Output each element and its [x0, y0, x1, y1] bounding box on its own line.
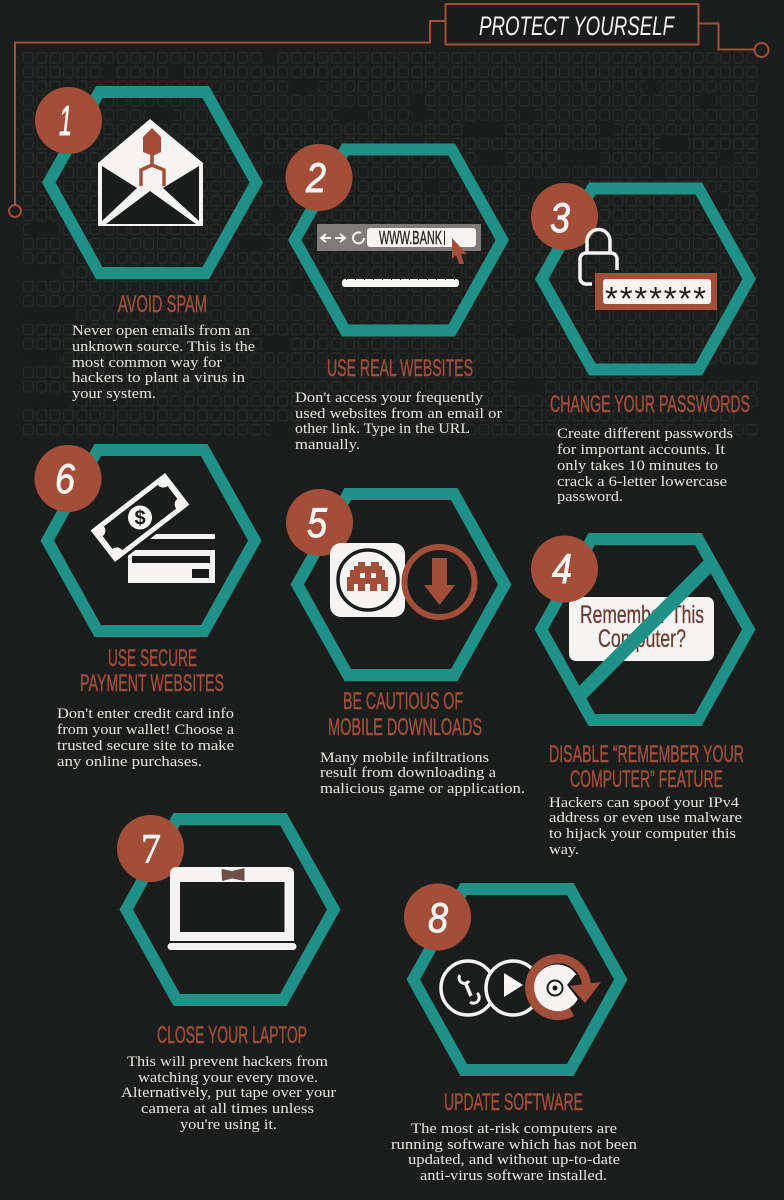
text block 3: only takes 10 minutes to	[557, 458, 718, 474]
text block 7: you're using it.	[180, 1117, 277, 1133]
hexagon 1	[42, 86, 263, 279]
hexagon 7	[120, 813, 340, 1006]
panel 8: update software	[391, 883, 638, 1184]
text block 4: address or even use malware	[549, 810, 742, 826]
text block 2: used websites from an email or	[295, 406, 502, 422]
text block 3: for important accounts. It	[557, 442, 726, 458]
icon: game app	[330, 543, 405, 617]
text block 8: anti-virus software installed.	[420, 1168, 607, 1184]
number badge 3	[531, 183, 598, 250]
number badge 7: 7	[141, 827, 161, 873]
number badge 2: 2	[305, 154, 326, 201]
text block 6: Don't enter credit card info	[57, 706, 234, 722]
heading 6: PAYMENT WEBSITES	[80, 670, 224, 697]
heading 5: MOBILE DOWNLOADS	[328, 714, 482, 741]
text block 6: from your wallet! Choose a	[57, 722, 234, 738]
icon: banknote	[91, 473, 191, 564]
text block 4: way.	[549, 842, 579, 858]
number badge 5	[286, 489, 353, 556]
hexagon 5	[290, 488, 512, 681]
title banner	[446, 4, 698, 44]
hexagon 8	[406, 883, 628, 1076]
icon: padlock and password field: *******	[605, 280, 706, 317]
title banner: PROTECT YOURSELF	[479, 11, 675, 41]
number badge 2	[286, 144, 352, 211]
text block 7	[121, 1054, 336, 1133]
number badge 4: 4	[552, 545, 572, 592]
icon: browser address bar	[317, 224, 481, 287]
text block 5: malicious game or application.	[320, 781, 525, 797]
text block 2	[295, 390, 502, 453]
icon: infected envelope	[98, 119, 203, 226]
text block 5	[320, 750, 525, 797]
icon: prohibition slash	[574, 555, 717, 703]
text block 8	[391, 1121, 638, 1184]
hexagon 3	[535, 182, 756, 376]
text block 6	[57, 706, 234, 770]
text block 3: crack a 6-letter lowercase	[557, 474, 727, 490]
number badge 4	[531, 536, 598, 602]
text block 1: most common way for	[72, 355, 222, 371]
number badge 7	[117, 815, 184, 882]
text block 6: trusted secure site to make	[57, 738, 234, 754]
number badge 5: 5	[307, 499, 328, 546]
panel 1: avoid spam	[35, 86, 263, 402]
heading 6: USE SECURE	[108, 645, 197, 672]
right circuit connector	[699, 24, 768, 57]
text block 1: hackers to plant a virus in	[72, 370, 246, 386]
heading 7: CLOSE YOUR LAPTOP	[157, 1022, 307, 1049]
text block 6: any online purchases.	[57, 754, 202, 770]
text block 8: running software which has not been	[391, 1137, 638, 1153]
number badge 1	[35, 87, 102, 154]
icon: remember prompt: Remember This	[580, 601, 704, 629]
text block 5: result from downloading a	[320, 765, 496, 781]
text block 2: Don't access your frequently	[295, 390, 484, 406]
text block 7: Alternatively, put tape over your	[121, 1085, 336, 1101]
heading 2: USE REAL WEBSITES	[327, 355, 473, 382]
heading 8: UPDATE SOFTWARE	[444, 1089, 583, 1116]
text block 7: This will prevent hackers from	[127, 1054, 328, 1070]
heading 1: AVOID SPAM	[118, 291, 207, 318]
text block 5: Many mobile infiltrations	[320, 750, 489, 766]
text block 3	[557, 426, 733, 505]
heading 5: BE CAUTIOUS OF	[343, 688, 463, 715]
left circuit connector	[9, 21, 445, 217]
text block 7: camera at all times unless	[141, 1101, 314, 1117]
icon: download arrow	[404, 547, 474, 617]
text block 3: password.	[557, 489, 623, 505]
heading 4	[549, 741, 744, 793]
icon: taped laptop	[168, 867, 296, 950]
icon: wrench settings	[441, 961, 495, 1015]
icon: remember prompt	[569, 597, 714, 661]
icon: browser address bar: WWW.BANK	[379, 228, 442, 248]
text block 1: your system.	[72, 386, 156, 402]
text block 1	[72, 323, 255, 402]
icon: remember prompt: Computer?	[598, 625, 686, 653]
text block 7: watching your every move.	[138, 1070, 318, 1086]
hexagon 4	[534, 533, 756, 726]
text block 1: unknown source. This is the	[72, 339, 255, 355]
number badge 8: 8	[428, 894, 449, 941]
text block 8: updated, and without up-to-date	[408, 1152, 620, 1168]
panel 2: use real websites	[286, 144, 509, 453]
text block 2: other link. Type in the URL	[295, 421, 470, 437]
heading 6	[80, 645, 224, 697]
icon: update disc	[525, 954, 601, 1020]
panel 6: secure payment	[34, 444, 262, 770]
panel 4: disable remember computer	[531, 533, 756, 858]
icon: play	[486, 961, 540, 1015]
number badge 6: 6	[55, 455, 76, 502]
number badge 6	[34, 445, 102, 512]
icon: padlock and password field	[580, 230, 717, 317]
panel 3: change your passwords	[531, 182, 756, 505]
panel 7: close your laptop	[117, 813, 340, 1133]
text block 1: Never open emails from an	[72, 323, 251, 339]
hexagon 6	[40, 444, 262, 637]
icon: credit card	[128, 534, 215, 583]
text block 3: Create different passwords	[557, 426, 733, 442]
number badge 3: 3	[550, 194, 570, 241]
text block 4	[549, 795, 742, 858]
number badge 1: 1	[59, 97, 72, 144]
text block 4: to hijack your computer this	[549, 826, 736, 842]
heading 5	[328, 688, 482, 741]
text block 8: The most at-risk computers are	[411, 1121, 617, 1137]
text block 2: manually.	[295, 437, 360, 453]
text block 4: Hackers can spoof your IPv4	[549, 795, 740, 811]
panel 5: mobile downloads	[286, 488, 525, 797]
hexagon 2	[288, 144, 509, 336]
number badge 8	[404, 884, 471, 950]
icon: banknote: $	[134, 508, 146, 530]
